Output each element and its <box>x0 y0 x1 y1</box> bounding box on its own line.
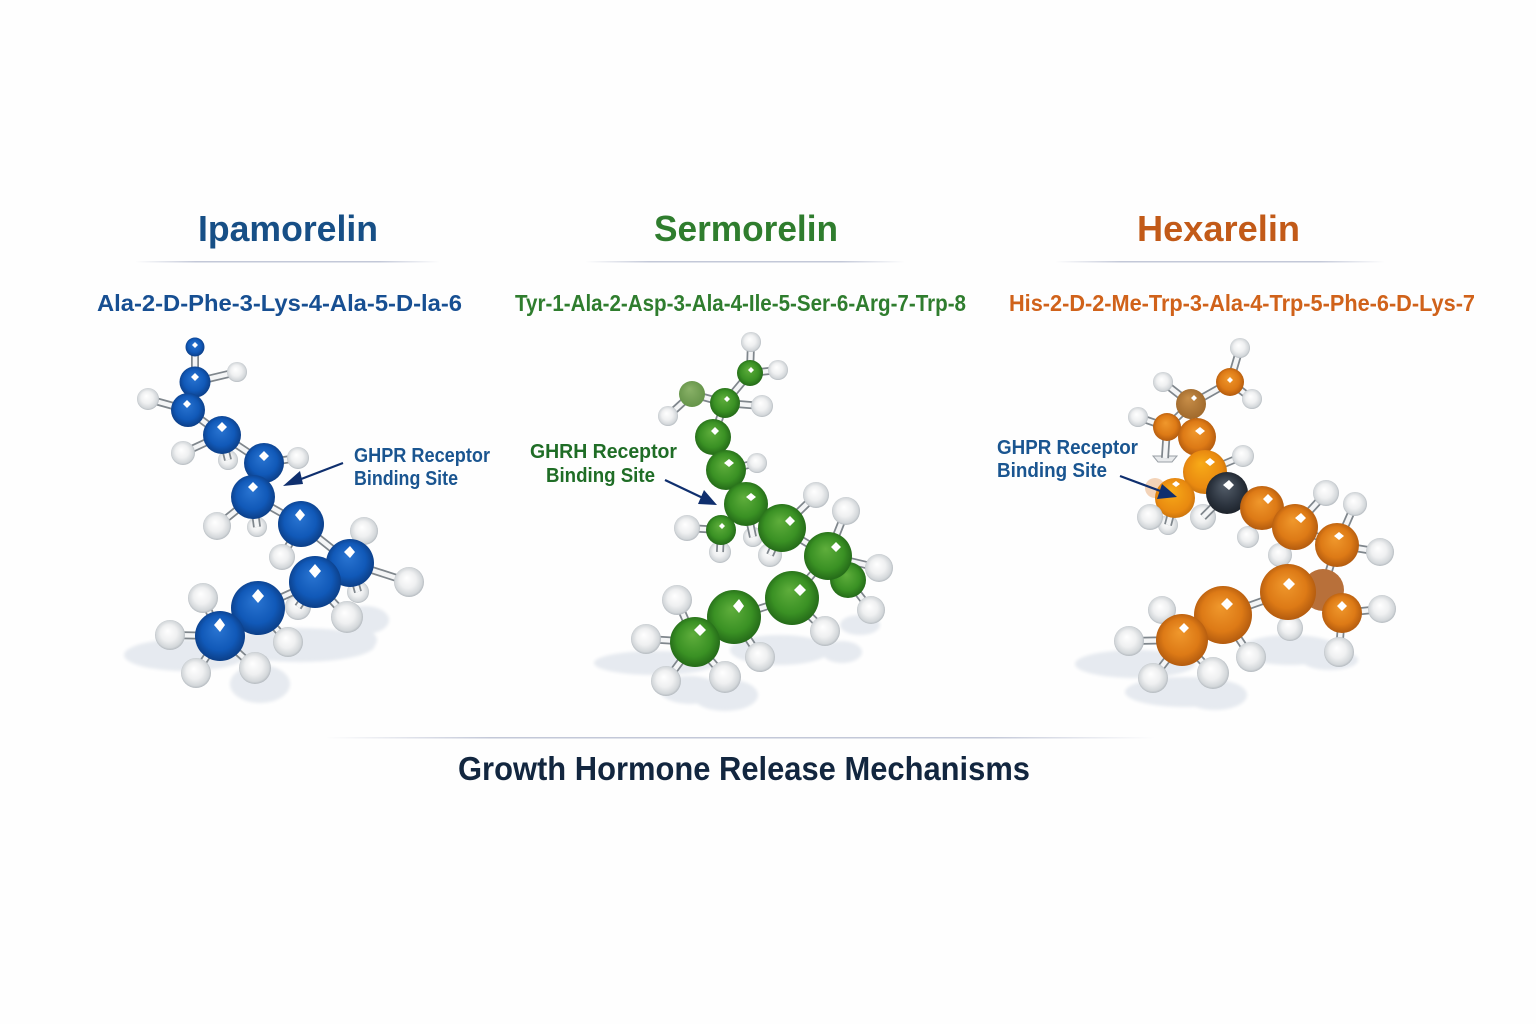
molecule model: Sermorelin <box>594 332 893 711</box>
heading: Hexarelin: Hexarelin <box>1137 208 1300 249</box>
panel: Hexarelin <box>997 208 1475 710</box>
footer title: Growth Hormone Release Mechanisms <box>458 750 1030 787</box>
callout label: GHPR Receptor Binding Site <box>997 437 1138 482</box>
heading: Ipamorelin: Ipamorelin <box>198 208 378 249</box>
callout label: GHPR Receptor Binding Site: GHPR Receptor <box>997 437 1138 459</box>
peptide sequence: Ipamorelin: Ala-2-D-Phe-3-Lys-4-Ala-5-D-la-6 <box>97 290 462 316</box>
callout label: GHPR Receptor Binding Site: Binding Site <box>354 468 458 490</box>
heading: Sermorelin: Sermorelin <box>654 208 838 249</box>
callout label: GHPR Receptor Binding Site: Binding Site <box>997 460 1107 482</box>
arrow: to binding site <box>283 463 343 486</box>
callout label: GHPR Receptor Binding Site <box>354 445 490 490</box>
callout label: GHPR Receptor Binding Site: GHPR Receptor <box>354 445 490 467</box>
callout label: GHRH Receptor Binding Site: GHRH Receptor <box>530 441 677 463</box>
peptide sequence: Sermorelin: Tyr-1-Ala-2-Asp-3-Ala-4-Ile-5-Ser-6-Arg-7-Trp-8 <box>515 290 966 316</box>
panel: Sermorelin <box>515 208 966 711</box>
molecule model: Hexarelin <box>1075 338 1396 710</box>
arrow: to binding site <box>665 480 717 505</box>
peptide sequence: Hexarelin: His-2-D-2-Me-Trp-3-Ala-4-Trp-5-Phe-6-D-Lys-7 <box>1009 290 1475 316</box>
callout label: GHRH Receptor Binding Site <box>530 441 677 487</box>
molecule model: Ipamorelin <box>124 338 424 703</box>
arrow: to binding site <box>1120 476 1177 499</box>
panel: Ipamorelin <box>97 208 490 703</box>
callout label: GHRH Receptor Binding Site: Binding Site <box>546 465 655 487</box>
